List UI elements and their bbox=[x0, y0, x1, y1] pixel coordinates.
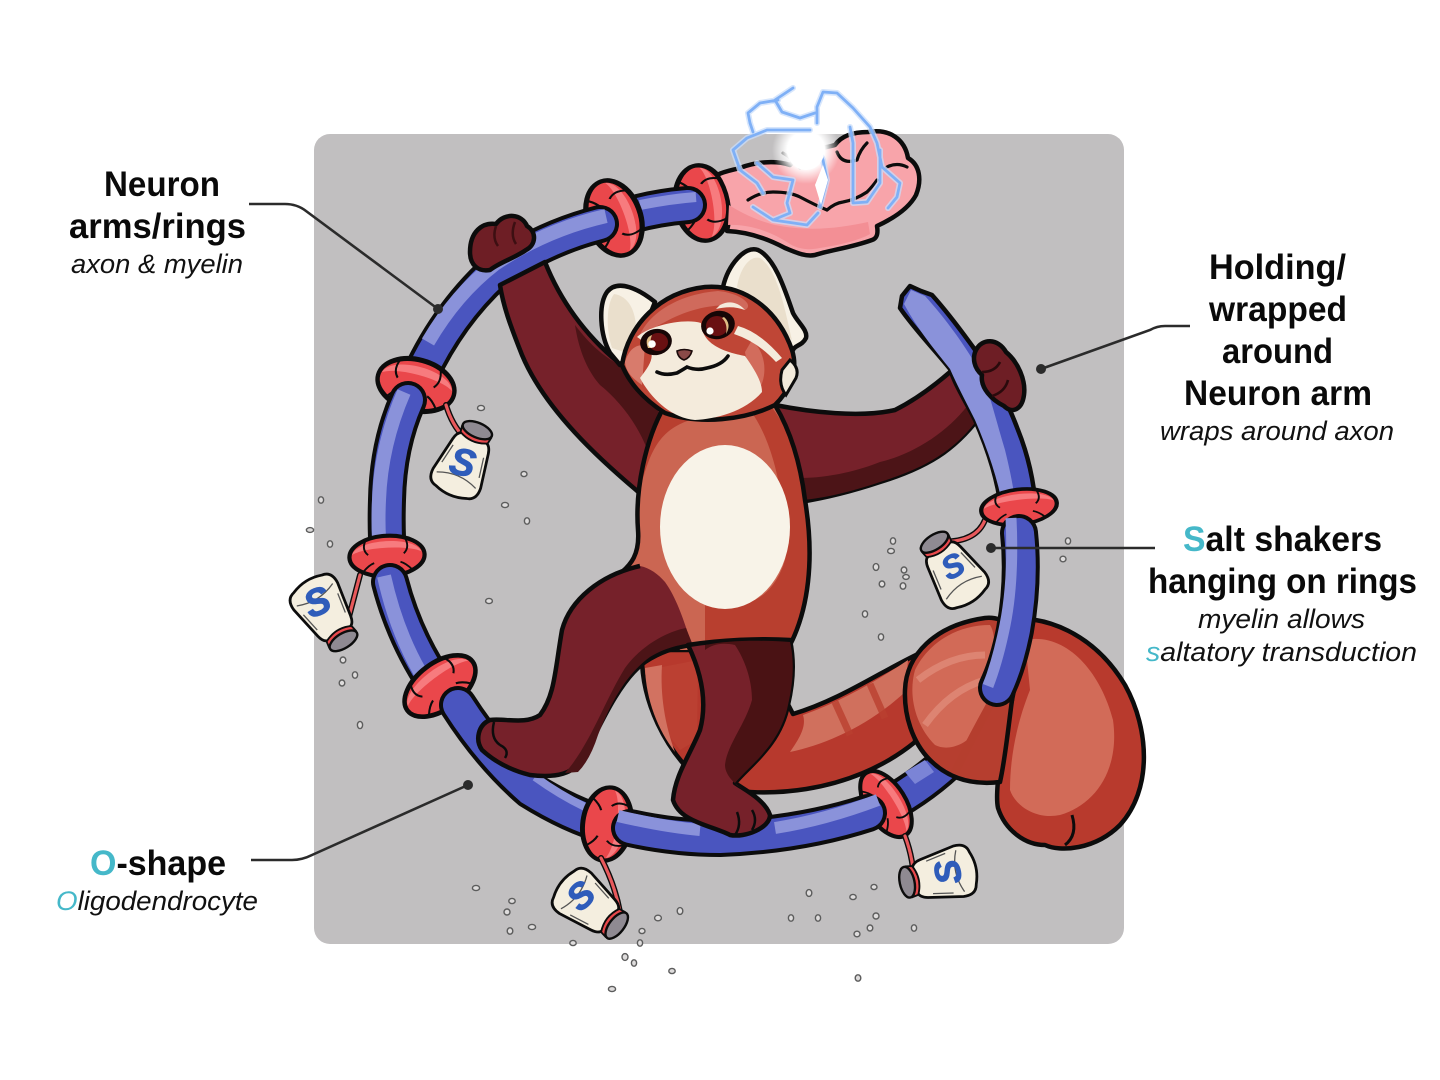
label: Salt shakers hanging on rings bbox=[1146, 520, 1417, 667]
torso bbox=[622, 405, 810, 650]
label: Salt shakers hanging on rings: Salt shakers bbox=[1183, 520, 1382, 559]
nose bbox=[677, 350, 692, 360]
ring 6 bbox=[578, 784, 636, 864]
red panda body bbox=[470, 216, 985, 836]
label: Holding/wrapped around Neuron arm: Neuron arm bbox=[1184, 374, 1372, 413]
label: Holding/wrapped around Neuron arm bbox=[1160, 248, 1394, 446]
salt shaker 2 bbox=[284, 567, 369, 661]
axon: top segment to hand bbox=[614, 197, 696, 220]
label: O-shape Oligodendrocyte: O-shape bbox=[90, 844, 226, 883]
right eye bbox=[698, 307, 738, 343]
label: Neuron arms/rings: Neuron bbox=[104, 165, 220, 204]
label: Salt shakers hanging on rings: saltatory transduction bbox=[1146, 637, 1417, 667]
axon: upper right end bbox=[900, 286, 1036, 510]
ring 2 at hand bbox=[669, 161, 735, 245]
label: Holding/wrapped around Neuron arm: around bbox=[1222, 332, 1333, 371]
right ear bbox=[723, 249, 806, 350]
axon: bottom arc bbox=[618, 800, 878, 838]
label: Neuron arms/rings bbox=[69, 165, 246, 279]
leader line: neuron arms bbox=[249, 204, 443, 314]
tail tip bbox=[985, 618, 1144, 848]
salt shaker 5: S bbox=[925, 857, 970, 888]
salt grains bbox=[306, 405, 1071, 992]
panel: grey background bbox=[314, 134, 1124, 944]
left leg bbox=[478, 566, 692, 776]
leader line: holding bbox=[1036, 326, 1190, 374]
ring 7 bbox=[850, 762, 922, 846]
belly patch bbox=[660, 445, 790, 609]
axon segment behind tail bbox=[886, 755, 955, 806]
axon: upper-left arc bbox=[416, 216, 606, 385]
label: Holding/wrapped around Neuron arm: Holding/ bbox=[1209, 248, 1346, 287]
ring 4 bbox=[348, 534, 426, 578]
salt shaker 2: S bbox=[298, 579, 337, 627]
salt shaker 3: S bbox=[935, 545, 971, 587]
salt shaker strings bbox=[345, 405, 985, 912]
right leg bbox=[673, 639, 793, 836]
label: O-shape Oligodendrocyte: Oligodendrocyte bbox=[56, 886, 258, 916]
label: Neuron arms/rings: arms/rings bbox=[69, 207, 246, 246]
ring 5 bbox=[394, 643, 486, 729]
label: O-shape Oligodendrocyte bbox=[56, 844, 258, 916]
label: Salt shakers hanging on rings: hanging on rings bbox=[1148, 562, 1417, 601]
salt shaker 4 bbox=[545, 862, 638, 950]
label: Neuron arms/rings: axon & myelin bbox=[71, 249, 243, 279]
leader line: salt shakers bbox=[986, 543, 1155, 553]
ring 1 bbox=[576, 173, 652, 263]
red panda tail bbox=[642, 618, 1144, 848]
axon: lower-left arc bbox=[384, 576, 440, 690]
cheek fluff bbox=[781, 360, 797, 395]
axon: left arc bbox=[378, 392, 408, 555]
left paw on axon bbox=[470, 216, 534, 270]
salt shaker 4: S bbox=[558, 872, 603, 919]
salt shaker 1: S bbox=[446, 440, 479, 486]
axon: lower right over tail bbox=[988, 518, 1021, 688]
right paw on axon bbox=[974, 341, 1024, 410]
leader line: O-shape bbox=[251, 780, 473, 860]
label: Holding/wrapped around Neuron arm: wrapped bbox=[1208, 290, 1347, 329]
left eye bbox=[638, 326, 674, 358]
label: Salt shakers hanging on rings: myelin allows bbox=[1198, 604, 1365, 634]
left ear bbox=[601, 286, 655, 365]
pink neuron hand bbox=[717, 131, 919, 255]
face mask bbox=[637, 321, 762, 420]
mouth bbox=[657, 356, 728, 374]
salt shaker 3 bbox=[909, 522, 994, 615]
tail ball bbox=[905, 618, 1022, 783]
label: Holding/wrapped around Neuron arm: wraps around axon bbox=[1160, 416, 1394, 446]
ring 8 bbox=[979, 485, 1059, 529]
right arm bbox=[775, 372, 985, 502]
salt shaker 5 bbox=[895, 842, 981, 909]
ring 3 bbox=[372, 350, 460, 420]
salt shaker 1 bbox=[426, 413, 504, 505]
head bbox=[622, 287, 797, 420]
lightning sparks bbox=[733, 88, 900, 225]
left arm bbox=[500, 262, 675, 495]
axon: bottom-left arc bbox=[458, 705, 608, 826]
